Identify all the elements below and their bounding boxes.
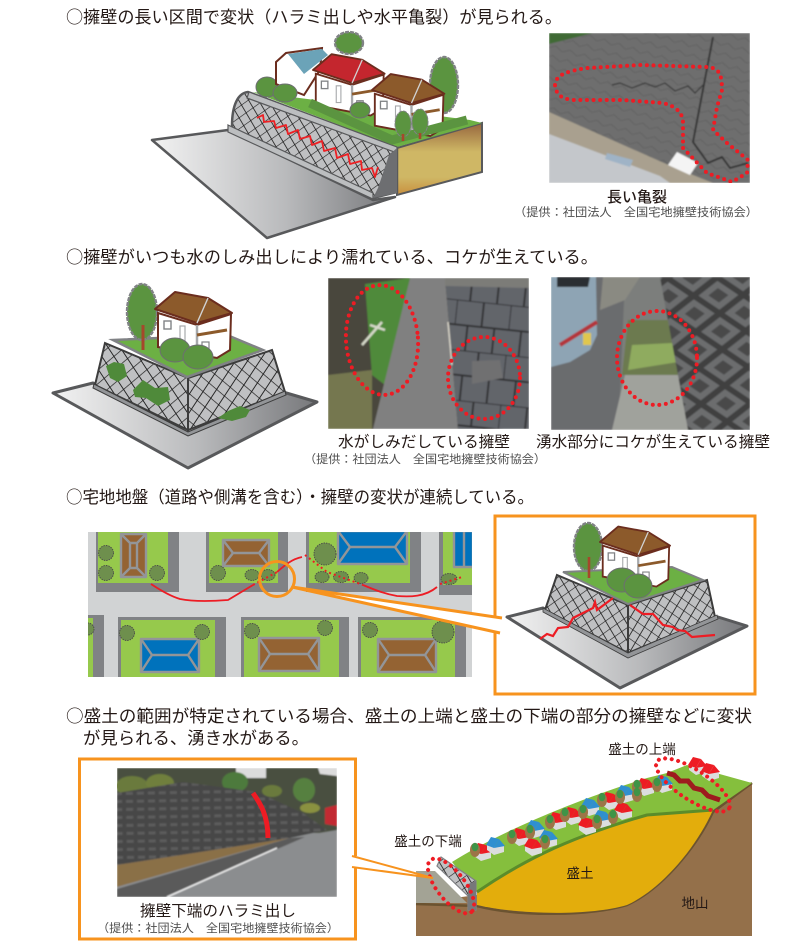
panel: orange detail box [495, 516, 755, 694]
wall [545, 575, 628, 653]
tree [127, 284, 157, 340]
labels: 盛土の上端 [608, 738, 676, 758]
illustration: corner wall with moss [53, 284, 317, 468]
heading continuation: が見られる、湧き水がある。 [83, 724, 309, 749]
house [155, 292, 232, 358]
road [507, 608, 747, 688]
caption: moss wall: 湧水部分にコケが生えている擁壁 [536, 430, 770, 452]
caption: long crack: 長い亀裂 [607, 186, 667, 207]
cross-section: embankment diagram: 地山 [682, 892, 708, 912]
heading: section 1: ○擁壁の長い区間で変状（ハラミ出しや水平亀裂）が見られる。 [66, 3, 562, 28]
cross-section: embankment diagram [394, 738, 752, 936]
illustration: long retaining wall with houses [152, 32, 482, 238]
heading: section 3: ○宅地地盤（道路や側溝を含む）・擁壁の変状が連続している。 [66, 483, 534, 508]
crack [257, 115, 378, 177]
small houses [470, 757, 720, 861]
trees and shrubs [335, 32, 363, 54]
fill [477, 810, 713, 913]
roofs [121, 531, 473, 672]
crack line [151, 555, 462, 601]
trees [82, 543, 457, 643]
crest crack [667, 773, 720, 800]
credit: （提供：社団法人 全国宅地擁壁技術協会） [514, 204, 758, 220]
caption: 擁壁下端のハラミ出し [140, 899, 296, 921]
red dotted outline [555, 65, 748, 182]
cross-section: embankment diagram: 盛土 [566, 862, 594, 882]
natural ground [416, 783, 752, 936]
wall lattice [232, 92, 397, 198]
photo: long crack [549, 33, 750, 183]
moss [106, 362, 127, 382]
photo: moss at seepage [551, 277, 750, 430]
photo: seeping wall [328, 278, 529, 429]
callout: orange lens with lines to detail [260, 562, 502, 633]
bushes [160, 338, 190, 362]
heading: section 2: ○擁壁がいつも水のしみ出しにより濡れている、コケが生えている。 [66, 243, 598, 268]
houses [276, 48, 322, 95]
captions: section 2: 水がしみだしている擁壁 [338, 430, 510, 452]
car [551, 277, 597, 367]
credit: （提供：社団法人 全国宅地擁壁技術協会） [97, 920, 339, 936]
tree [574, 523, 602, 571]
cross-section: embankment diagram: 盛土の下端 [394, 830, 462, 850]
credit: （提供：社団法人 全国宅地擁壁技術協会） [304, 451, 546, 467]
photo: wall bulge [116, 768, 337, 897]
callout: lines from photo box to toe of fill [352, 856, 433, 878]
toe wall [416, 871, 467, 903]
slope surface [452, 765, 752, 892]
house [600, 527, 670, 587]
map: residential plots [82, 531, 473, 677]
heading: section 4: ○盛土の範囲が特定されている場合、盛土の上端と盛土の下端の部分の擁壁などに変状 [66, 702, 752, 727]
panel: orange photo box [80, 759, 356, 939]
red dotted ellipses [342, 283, 422, 397]
cracks [540, 598, 613, 639]
red dotted ellipses [420, 851, 482, 921]
red dotted ellipse [617, 311, 697, 405]
